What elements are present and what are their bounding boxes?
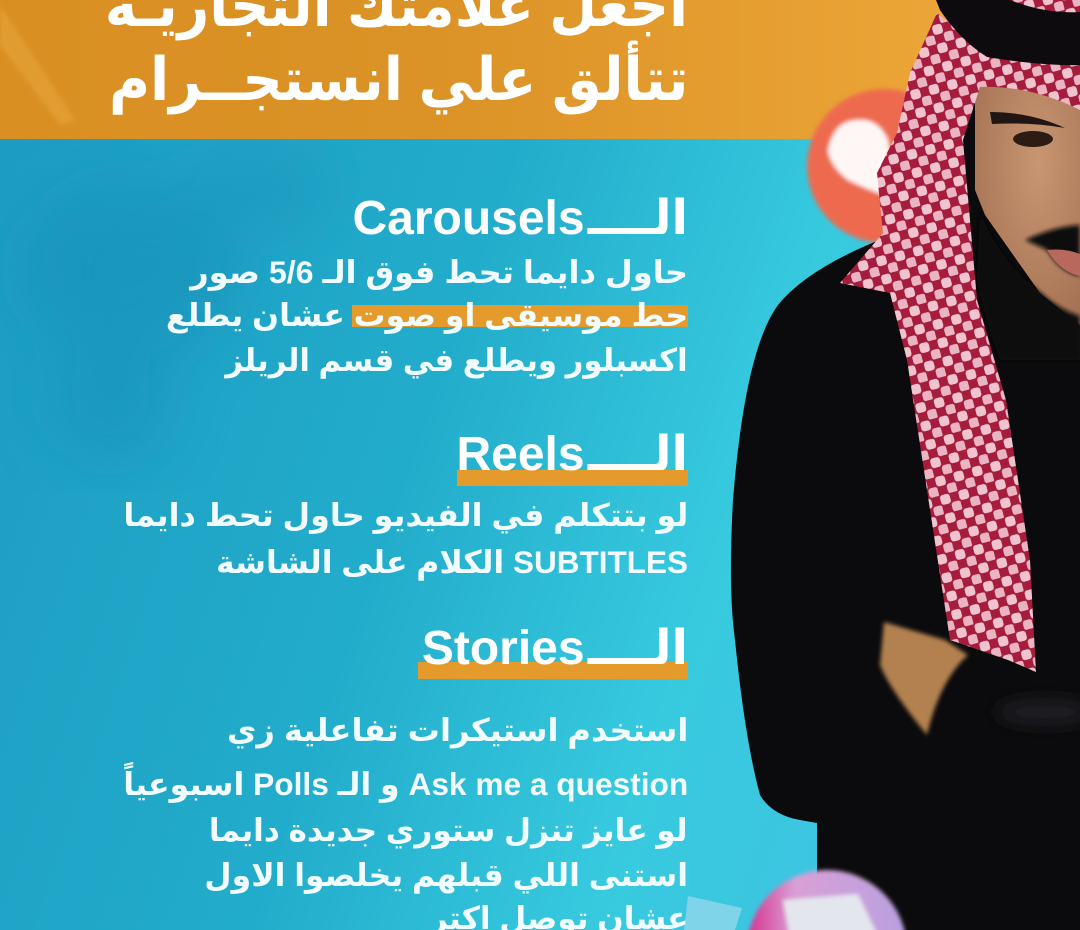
lips xyxy=(1047,250,1080,276)
person face xyxy=(975,75,1080,325)
orange banner xyxy=(0,0,1080,139)
body line: لو بتتكلم في الفيديو حاول تحط دايما xyxy=(123,497,688,533)
body line: استخدم استيكرات تفاعلية زي xyxy=(227,712,688,748)
purple bubble xyxy=(747,870,907,930)
highlight bar xyxy=(352,305,688,327)
heading: Carousels: الــــ Carousels xyxy=(352,192,688,245)
heading: Reels: الــــ Reels xyxy=(456,428,688,481)
underline: Reels xyxy=(457,470,688,486)
light blue square decoration xyxy=(684,896,742,930)
agal headband xyxy=(936,0,1080,65)
body line: حط موسيقى او صوت عشان يطلع xyxy=(166,297,688,333)
person robe xyxy=(731,100,1080,930)
robe highlight xyxy=(995,698,1080,726)
body line: SUBTITLES الكلام على الشاشة xyxy=(216,544,688,580)
person hand xyxy=(880,622,968,735)
agal top pattern xyxy=(1010,0,1080,12)
body line: حاول دايما تحط فوق الـ 5/6 صور xyxy=(190,254,688,290)
ghutra headscarf xyxy=(840,13,1080,672)
body line: Ask me a question و الـ Polls اسبوعياً xyxy=(123,766,688,802)
body line: اكسبلور ويطلع في قسم الريلز xyxy=(226,342,688,378)
light streak xyxy=(0,5,75,125)
underline: Stories xyxy=(418,662,688,679)
title line 2: تتألق علي انستجــرام xyxy=(108,46,688,113)
eyebrow xyxy=(990,112,1065,128)
red like bubble xyxy=(807,89,961,243)
eye xyxy=(1013,131,1053,147)
body line: استنى اللي قبلهم يخلصوا الاول xyxy=(204,857,688,893)
heading: Stories: الــــ Stories xyxy=(422,622,688,675)
body line: لو عايز تنزل ستوري جديدة دايما xyxy=(209,812,688,848)
person beard xyxy=(977,212,1080,360)
